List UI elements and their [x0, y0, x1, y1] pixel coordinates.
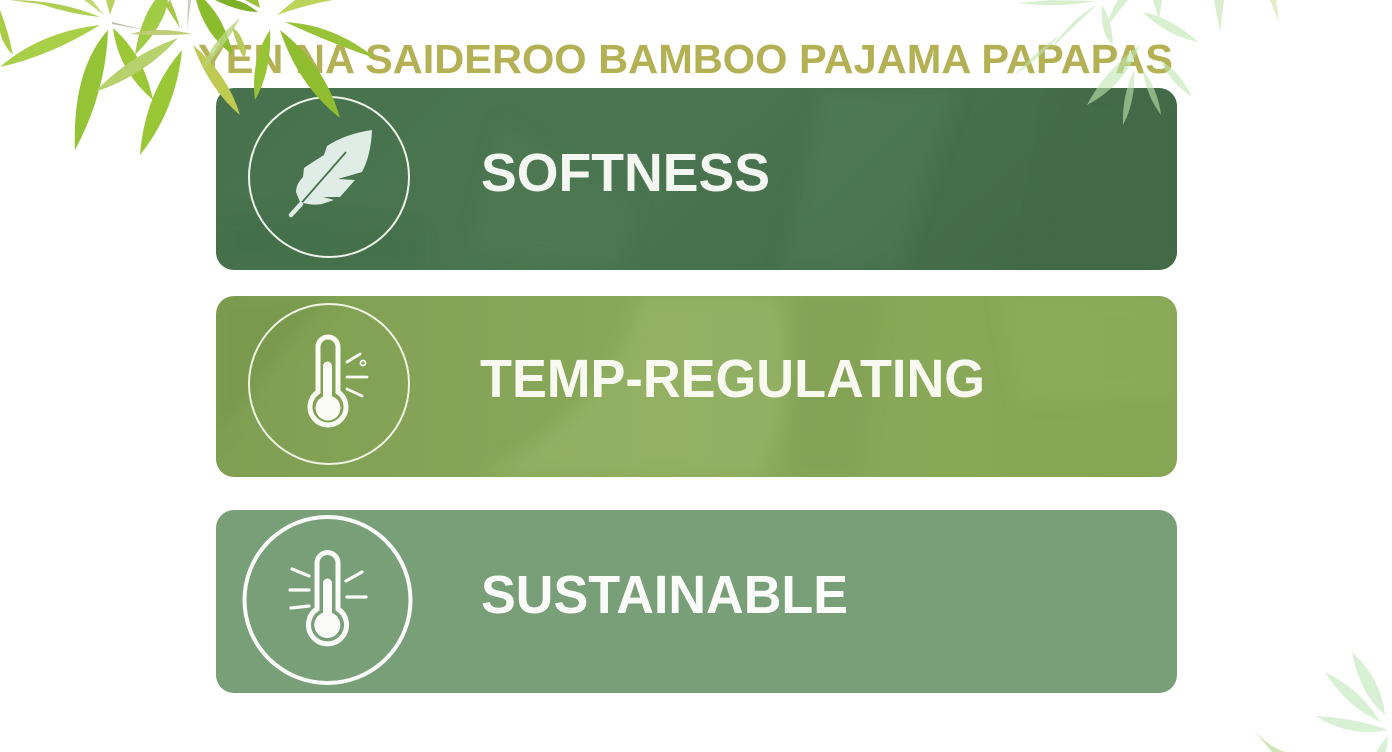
- bamboo leaves: top right: [1015, 0, 1279, 125]
- label: softness: SOFTNESS: [481, 143, 770, 203]
- icon: thermometer with droplet: [249, 304, 409, 464]
- panel: temp-regulating: [216, 296, 1177, 477]
- panel: softness: [216, 88, 1177, 270]
- icon: feather in circle: [249, 97, 409, 257]
- label: temp-regulating: TEMP-REGULATING: [480, 349, 985, 409]
- bamboo leaves: bottom right: [1250, 652, 1388, 752]
- panel: sustainable: [216, 510, 1177, 693]
- title: YEN NA SAIDEROO BAMBOO PAJAMA PAPAPAS: [198, 36, 1173, 82]
- label: sustainable: SUSTAINABLE: [481, 565, 848, 625]
- bamboo leaves: top left: [0, 0, 375, 155]
- icon: thermometer with rays: [244, 517, 410, 683]
